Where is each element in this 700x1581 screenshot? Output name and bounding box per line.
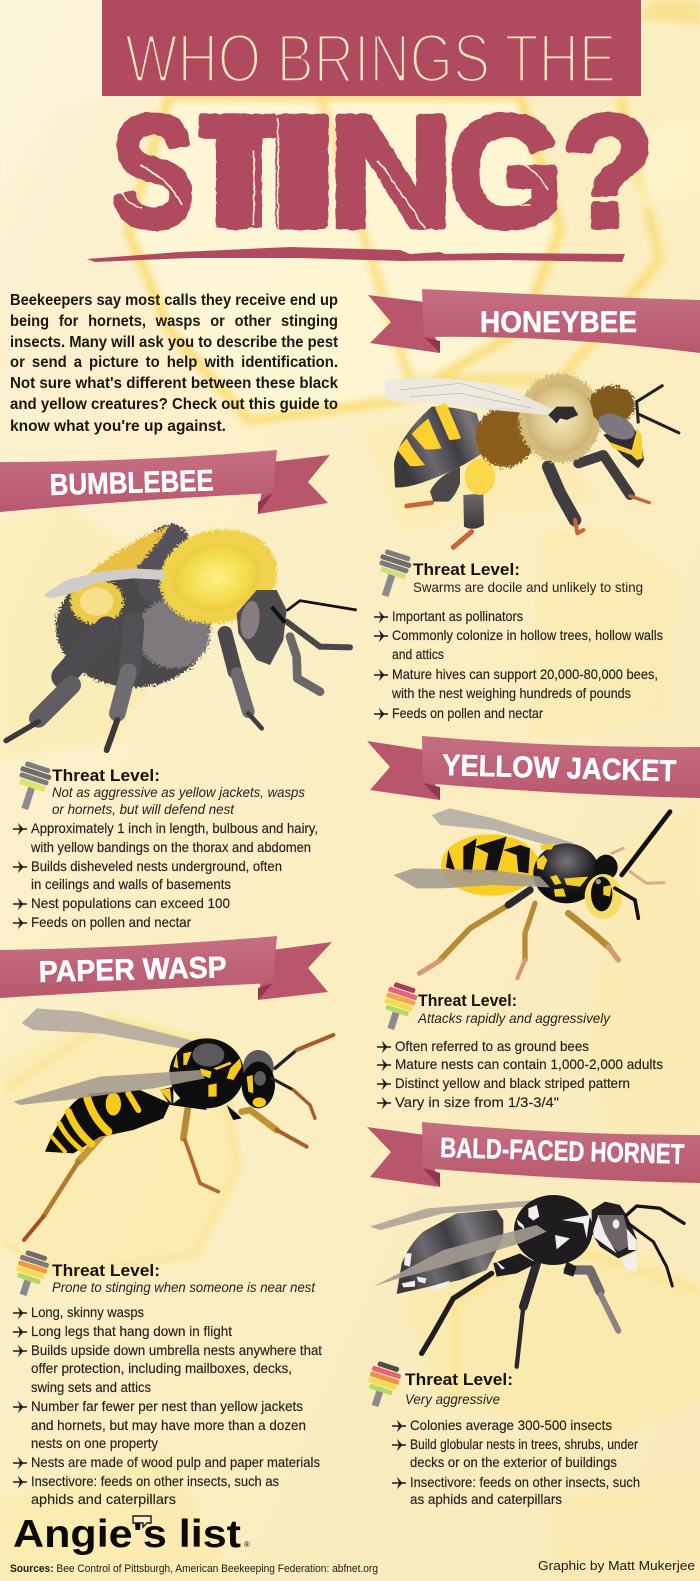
facts: bald-faced hornet: Insectivore: feeds on other insects, such — [410, 1475, 640, 1490]
ribbon: yellow jacket — [367, 736, 700, 800]
illustration: bald-faced hornet — [370, 1195, 684, 1367]
facts: bald-faced hornet: Build globular nests in trees, shrubs, under — [410, 1437, 638, 1452]
intro paragraph: being for hornets, wasps or other stinging — [10, 313, 338, 330]
icon: grey dipper — [369, 548, 414, 601]
icon: rainbow dipper — [377, 981, 420, 1034]
threat level: bumblebee: or hornets, but will defend nest — [52, 802, 235, 817]
facts: bumblebee: Approximately 1 inch in length, bulbous and hairy, — [31, 821, 318, 836]
facts: honeybee — [374, 609, 663, 721]
facts: paper wasp: aphids and caterpillars — [31, 1492, 176, 1507]
threat level: paper wasp — [9, 1249, 316, 1300]
icon: dark rainbow dipper — [361, 1360, 403, 1411]
threat level: bald-faced hornet — [361, 1360, 513, 1411]
threat level: bumblebee: Threat Level: — [52, 766, 160, 785]
ribbon: paper wasp: PAPER WASP — [38, 951, 227, 989]
threat level: honeybee: Threat Level: — [413, 560, 520, 579]
facts: paper wasp: Number far fewer per nest than yellow jackets — [31, 1399, 303, 1414]
ribbon: bald-faced hornet — [367, 1122, 700, 1187]
brush underline — [87, 247, 625, 262]
logo: Angie's List: Angie's list — [13, 1513, 241, 1556]
facts: paper wasp: Builds upside down umbrella nests anywhere that — [31, 1343, 322, 1358]
threat level: bumblebee: Not as aggressive as yellow jackets, wasps — [52, 785, 305, 800]
facts: yellow jacket — [377, 1039, 663, 1110]
threat level: bald-faced hornet: Threat Level: — [405, 1370, 513, 1389]
facts: bumblebee: Feeds on pollen and nectar — [31, 915, 191, 930]
illustration: bumblebee — [6, 516, 357, 750]
threat level: honeybee — [369, 548, 643, 601]
facts: paper wasp: and hornets, but may have more than a dozen — [31, 1418, 306, 1433]
facts: bumblebee: with yellow bandings on the thorax and abdomen — [30, 840, 311, 855]
facts: yellow jacket: Often referred to as ground bees — [395, 1039, 589, 1054]
intro paragraph — [10, 292, 338, 435]
title — [87, 0, 654, 262]
ribbon: honeybee — [368, 289, 700, 353]
facts: honeybee: Commonly colonize in hollow trees, hollow walls — [392, 628, 663, 643]
intro paragraph: Beekeepers say most calls they receive end up — [10, 292, 338, 309]
facts: paper wasp: Nests are made of wood pulp and paper materials — [31, 1455, 320, 1470]
facts: honeybee: with the nest weighing hundreds of pounds — [391, 686, 631, 701]
facts: honeybee: Feeds on pollen and nectar — [392, 706, 543, 721]
intro paragraph: Not sure what's different between these black — [10, 375, 338, 392]
facts: bumblebee: Nest populations can exceed 100 — [31, 896, 230, 911]
ribbon: paper wasp — [0, 936, 332, 1000]
threat level: yellow jacket: Threat Level: — [418, 991, 517, 1010]
intro paragraph: and yellow creatures? Check out this guide to — [10, 396, 338, 413]
threat level: paper wasp: Threat Level: — [52, 1261, 160, 1280]
sources: Sources: Bee Control of Pittsburgh, American Beekeeping Federation: abfnet.org — [10, 1563, 378, 1575]
title word: sting: G — [449, 84, 563, 260]
facts: paper wasp: offer protection, including mailboxes, decks, — [31, 1361, 292, 1376]
facts: bumblebee: Builds disheveled nests underground, often — [31, 859, 282, 874]
illustration: paper wasp — [13, 1008, 333, 1240]
title word: sting: ? — [562, 84, 654, 260]
logo: Angie's List: ® — [244, 1540, 250, 1549]
ribbon: bumblebee — [0, 450, 330, 514]
title banner — [102, 0, 641, 96]
title word: sting: T — [200, 84, 275, 260]
facts: paper wasp — [13, 1305, 322, 1507]
threat level: paper wasp: Prone to stinging when someone is near nest — [52, 1280, 316, 1295]
credit: Graphic by Matt Mukerjee — [538, 1558, 695, 1573]
illustration: honeybee — [385, 374, 680, 547]
facts: paper wasp: swing sets and attics — [31, 1380, 151, 1395]
facts: bald-faced hornet — [392, 1418, 640, 1507]
intro paragraph: know what you're up against. — [10, 418, 226, 435]
facts: honeybee: and attics — [392, 647, 444, 662]
icon: grey dipper — [9, 760, 54, 814]
icon: dipper with grey and colour bands — [9, 1249, 51, 1300]
facts: bald-faced hornet: Colonies average 300-500 insects — [410, 1418, 612, 1433]
threat level: bald-faced hornet: Very aggressive — [405, 1392, 500, 1407]
title word: sting: N — [328, 84, 454, 260]
title word: sting: S — [112, 84, 194, 260]
facts: bumblebee: in ceilings and walls of basements — [31, 877, 231, 892]
intro paragraph: or send a picture to help with identification. — [10, 354, 338, 371]
facts: yellow jacket: Vary in size from 1/3-3/4" — [395, 1095, 559, 1110]
title word: sting — [112, 84, 654, 260]
threat level: yellow jacket — [377, 981, 611, 1034]
ribbon: honeybee: HONEYBEE — [480, 306, 637, 339]
ribbon: yellow jacket: YELLOW JACKET — [442, 749, 677, 788]
facts: yellow jacket: Distinct yellow and black striped pattern — [395, 1076, 630, 1091]
threat level: yellow jacket: Attacks rapidly and aggressively — [417, 1011, 611, 1026]
facts: bald-faced hornet: as aphids and caterpillars — [410, 1492, 562, 1507]
facts: paper wasp: Insectivore: feeds on other insects, such as — [31, 1474, 279, 1489]
facts: bald-faced hornet: decks or on the exterior of buildings — [410, 1455, 617, 1470]
facts: honeybee: Important as pollinators — [392, 609, 523, 624]
threat level: honeybee: Swarms are docile and unlikely to sting — [413, 580, 643, 595]
facts: paper wasp: nests on one property — [31, 1436, 158, 1451]
facts: paper wasp: Long, skinny wasps — [31, 1305, 144, 1320]
ribbon: bumblebee: BUMBLEBEE — [49, 464, 214, 502]
intro paragraph: insects. Many will ask you to describe the pest — [10, 334, 338, 351]
threat level: bumblebee — [9, 760, 305, 817]
illustration: yellow jacket — [393, 808, 670, 978]
facts: paper wasp: Long legs that hang down in flight — [31, 1324, 232, 1339]
facts: yellow jacket: Mature nests can contain 1,000-2,000 adults — [395, 1057, 663, 1072]
title word: sting: I — [263, 84, 341, 260]
facts: bumblebee — [13, 821, 318, 930]
facts: honeybee: Mature hives can support 20,000-80,000 bees, — [392, 667, 658, 682]
